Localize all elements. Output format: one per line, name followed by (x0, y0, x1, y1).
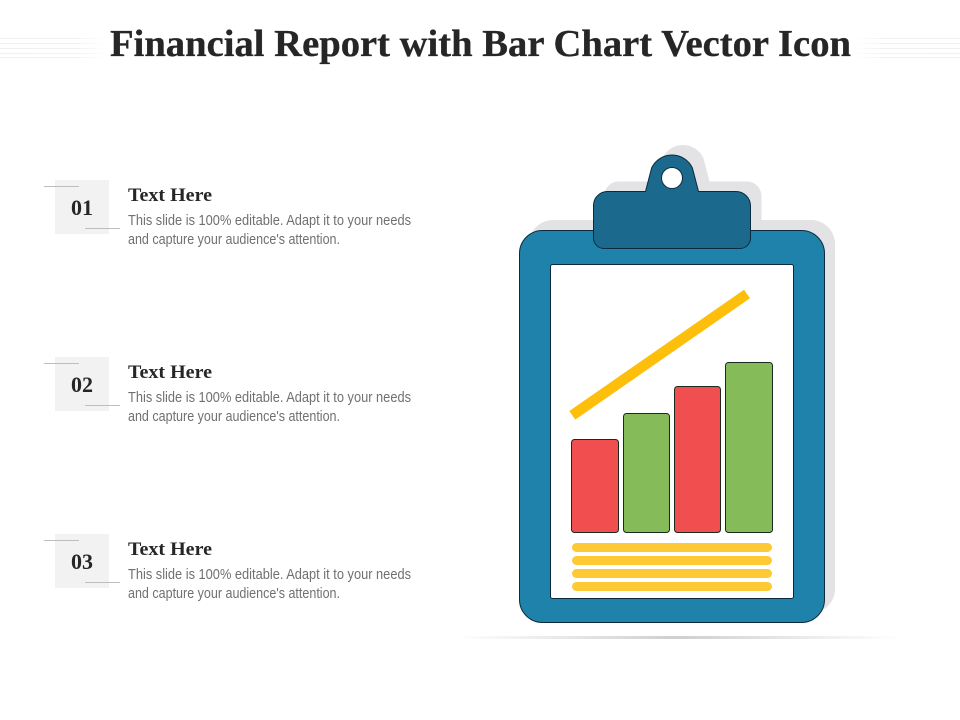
number badge 03: 03 (71, 549, 93, 574)
item 01 body (128, 212, 411, 248)
item 03 heading: Text Here (128, 539, 212, 560)
item 02 body: This slide is 100% editable. Adapt it to your needs (128, 389, 411, 406)
clipboard board (520, 230, 824, 622)
item 02 body: and capture your audience's attention. (128, 408, 340, 425)
item 02 (44, 357, 411, 425)
item 01 heading: Text Here (128, 185, 212, 206)
clipboard clip (593, 155, 750, 248)
text lines (572, 543, 772, 591)
item 03 body (128, 566, 411, 602)
number badge 03 (44, 534, 120, 588)
bar chart (572, 362, 772, 532)
ground shadow (455, 636, 900, 639)
number badge 01: 01 (71, 195, 93, 220)
number badge 02 (44, 357, 120, 411)
paper sheet (550, 264, 794, 598)
item 03 (44, 534, 411, 602)
item 01 body: This slide is 100% editable. Adapt it to your needs (128, 212, 411, 229)
clip hole (662, 168, 682, 188)
item 03 body: This slide is 100% editable. Adapt it to your needs (128, 566, 411, 583)
clipboard illustration (520, 145, 835, 622)
number badge 02: 02 (71, 372, 93, 397)
number badge 01 (44, 180, 120, 234)
clipboard drop shadow (529, 145, 835, 613)
item 01 body: and capture your audience's attention. (128, 231, 340, 248)
title: Financial Report with Bar Chart Vector Icon (110, 23, 851, 65)
trend line (572, 294, 747, 415)
item 02 body (128, 389, 411, 425)
item 01 (44, 180, 411, 248)
item 03 body: and capture your audience's attention. (128, 585, 340, 602)
item 02 heading: Text Here (128, 362, 212, 383)
